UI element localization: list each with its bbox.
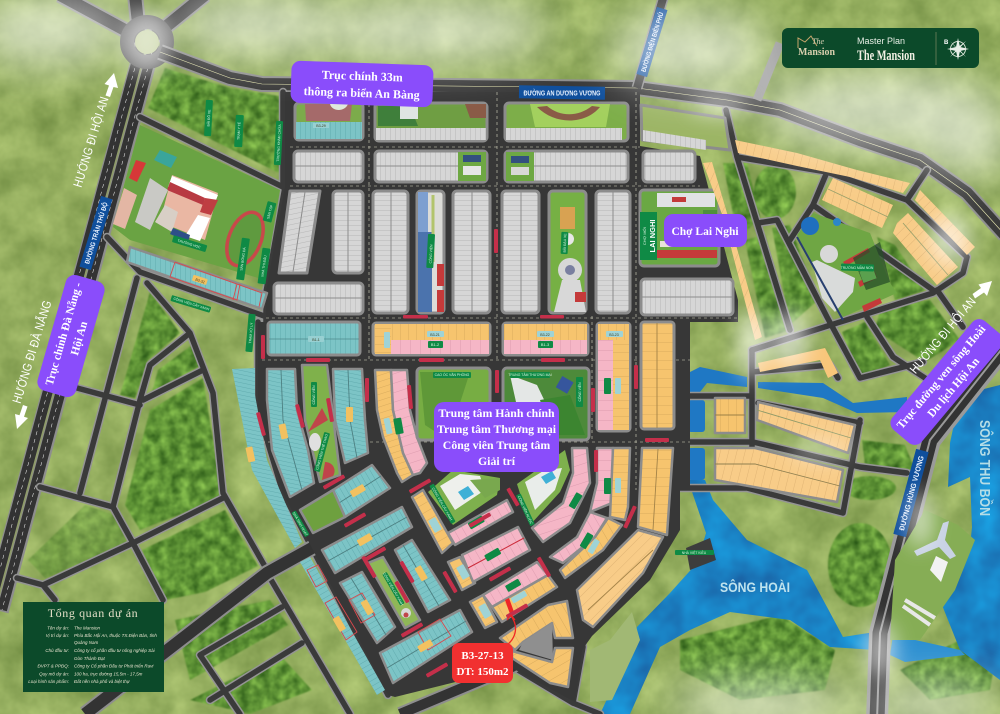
lot chips — [192, 123, 623, 653]
plate: Công viên văn hóa — [576, 377, 583, 407]
plate: park west 3 — [274, 121, 283, 165]
small river-side building — [686, 538, 716, 570]
plate: Trường học — [172, 235, 207, 252]
building: school main — [155, 175, 218, 242]
plate: block B1-5 — [484, 548, 501, 562]
logo: The Mansion mark: The — [812, 37, 824, 46]
callout: Trung tâm hành chính: Giải trí — [478, 454, 516, 468]
plate: block B1-b — [580, 532, 594, 549]
park: SE resort — [517, 450, 570, 525]
road sign: Đường An Dương Vương: ĐƯỜNG AN DƯƠNG VƯƠNG — [524, 88, 601, 98]
icon: compass — [944, 38, 969, 60]
logo: The Mansion mark — [798, 36, 835, 58]
plate: west park: CÔNG VIÊN — [311, 385, 316, 405]
callout: Trung tâm hành chính: Trung tâm Thương mại — [437, 422, 557, 436]
block B3-28 and pink — [448, 557, 475, 590]
plate: park west 1: BÃI ĐỖ XE — [206, 109, 211, 127]
land parcels: central yellow and pink — [373, 322, 674, 687]
block pink curves — [532, 448, 590, 542]
arrow: to Hội An north-west — [104, 73, 118, 97]
plate: block B1-8 — [604, 378, 611, 394]
chip B3-26 — [478, 603, 492, 619]
block B3-27 — [470, 595, 497, 628]
block B3-8 — [333, 369, 368, 463]
park: square with plaza — [549, 191, 586, 313]
plate: park sport: CÔNG VIÊN THỂ THAO — [314, 433, 329, 470]
mid lines: row 3 — [293, 192, 613, 312]
block: row 1 parks — [295, 103, 363, 140]
block B3-7 — [340, 572, 395, 643]
panel rows: Công ty cổ phần đầu tư nông nghiệp Sài — [74, 647, 156, 653]
plate: sân thể thao — [236, 238, 250, 280]
water: ponds and creek — [688, 367, 907, 480]
block B1-1 — [268, 322, 360, 355]
callout: Trung tâm hành chính: Trung tâm Hành chính — [438, 406, 555, 420]
direction label: Hướng đi Hội An (north-west): HƯỚNG ĐI HỘI AN — [70, 95, 112, 189]
block B3-21 — [373, 323, 490, 355]
block B3-10 — [395, 540, 450, 612]
callout: Trục chính 33m: Trục chính 33m — [321, 68, 403, 84]
plate: sân tập: SÂN TẬP — [266, 204, 274, 219]
chip B3-9 — [333, 616, 346, 632]
strip far east — [915, 190, 975, 255]
chip B3-18 — [615, 378, 621, 394]
panel rows: ĐVPT & PPĐQ: — [37, 664, 70, 668]
plate: sân thể thao: SÂN BÓNG ĐÁ — [238, 246, 247, 271]
park artwork: row 1 — [305, 104, 610, 127]
arrow: to Hội An east — [972, 281, 992, 298]
block B3-4 — [267, 369, 314, 497]
plate: park west 2 — [234, 115, 244, 147]
main boulevard south-west — [85, 473, 600, 714]
block: row 4 west and market east — [274, 283, 363, 314]
block B3-6 — [333, 465, 390, 517]
river label: Sông Hoài: SÔNG HOÀI — [720, 578, 790, 595]
block east columns — [641, 322, 674, 429]
arc strip north-east — [735, 140, 910, 193]
roundabout and connecting roads — [60, 0, 205, 62]
plate: block B1-a — [569, 492, 583, 509]
park: văn phòng — [417, 368, 490, 440]
road: Đường Hùng Vương — [877, 345, 1000, 714]
plate: park SW resort: CÔNG VIÊN CÂY XANH — [431, 486, 454, 522]
chip B3-6 — [350, 484, 366, 497]
callout: lot B3-27-13: DT: 150m2 — [456, 666, 509, 678]
land parcels: east yellow — [703, 140, 975, 502]
plate: block B1-2: B1-2 — [431, 342, 440, 347]
callout: Chợ Lai Nghi — [664, 214, 747, 247]
plate: Trường mầm non — [841, 263, 874, 272]
callout: Trục đường ven sông Hoài: Du lịch Hội An — [925, 355, 983, 420]
callout: Chợ Lai Nghi: Chợ Lai Nghi — [671, 226, 739, 238]
plate: park SE resort: CÔNG VIÊN NƯỚC — [517, 495, 534, 525]
plate: bãi đậu xe — [561, 232, 568, 254]
callout: Trung tâm hành chính: Công viên Trung tâm — [443, 438, 550, 452]
sports court — [154, 150, 177, 168]
water: Sông Hoài river — [600, 480, 875, 714]
panel: project overview — [23, 602, 164, 692]
plate: block B1-7 — [393, 417, 404, 435]
panel rows: Quy mô dự án: — [39, 672, 70, 676]
plate: Công viên văn hóa: CÔNG VIÊN — [577, 382, 582, 402]
chip B3-11 — [417, 639, 434, 653]
green name plates — [170, 100, 874, 607]
strip B3-32 — [127, 247, 267, 309]
plate: block B1-3: B1-3 — [541, 342, 550, 347]
small park south — [368, 557, 420, 628]
plate: Trung tâm thương mại — [508, 372, 552, 378]
plate: đồng nội — [426, 234, 435, 268]
lane markings — [262, 92, 740, 490]
block B3-11 — [380, 610, 472, 683]
panel rows: The Mansion — [74, 626, 101, 630]
chip B3-20 — [384, 332, 390, 348]
plate: Chợ mới Lai Nghi: CHỢ MỚI — [642, 227, 647, 245]
plate: park south: CÔNG VIÊN CÂY XANH — [382, 571, 405, 607]
block B3-9 — [300, 557, 385, 695]
chip B3-3 — [245, 446, 255, 462]
panel rows: Tên dự án: — [47, 626, 70, 630]
callout: Trục đường ven sông Hoài — [887, 315, 1000, 449]
block B3-5 — [322, 507, 412, 573]
red road name tags — [256, 229, 669, 678]
block: row 3 — [279, 191, 320, 273]
plate: trạm xử lý — [245, 314, 256, 352]
plate: block B1-2 — [428, 341, 443, 348]
chip B3-19 — [615, 478, 621, 493]
panel heading: Tổng quan dự án — [48, 606, 138, 620]
logo panel: The Mansion — [857, 48, 915, 64]
plate: park west 1 — [204, 100, 213, 136]
plate: block B1-4 — [505, 579, 521, 592]
callout: Trục chính Đà Nẵng - Hội An — [35, 273, 107, 399]
park: riverside path — [590, 612, 640, 702]
park of B3-6 — [300, 490, 345, 533]
road: Đường An Dương Vương — [160, 0, 1000, 235]
block west curve yellow pink — [375, 370, 413, 482]
plate: Cao ốc văn phòng — [433, 372, 471, 378]
logo: heading: Master Plan — [857, 36, 905, 46]
park: school — [113, 125, 280, 280]
plate: đồng nội: CÔNG VIÊN — [428, 244, 434, 264]
block B3-3 long — [232, 368, 302, 548]
block: row D north-east — [641, 105, 730, 150]
plate: Nhà sinh hoạt river — [675, 550, 714, 555]
callout: lot B3-27-13: B3-27-13 — [461, 650, 504, 662]
callout: Trục đường ven sông Hoài: Trục đường ven sông Hoài — [894, 322, 989, 432]
plate: block B1-c — [604, 478, 611, 494]
block large curved — [577, 530, 663, 627]
blocks south of creek — [715, 398, 745, 433]
icon: compass: B — [944, 40, 949, 46]
block east curved — [893, 213, 958, 285]
chip B3-23 — [606, 331, 623, 337]
callout: Trung tâm hành chính — [434, 402, 559, 472]
river label: Sông Thu Bồn: SÔNG THU BỒN — [976, 420, 994, 516]
chip B3-24 — [383, 418, 393, 434]
water: inlet near resort — [890, 635, 965, 662]
plate: sân tập — [263, 201, 276, 223]
plate: Trường mầm non: TRƯỜNG MẦM NON — [841, 265, 874, 270]
park: Lai Nghi market — [640, 190, 719, 266]
chip B3-25 — [587, 538, 600, 554]
chip B3-21 — [427, 331, 444, 337]
direction label: Hướng đi Hội An (east): HƯỚNG ĐI HỘI AN — [906, 294, 979, 376]
plate: Cao ốc văn phòng: CAO ỐC VĂN PHÒNG — [435, 372, 470, 377]
logo: The Mansion mark: Mansion — [798, 47, 835, 58]
callout: lot B3-27-13 — [452, 643, 513, 683]
direction label: Hướng đi Đà Nẵng: HƯỚNG ĐI ĐÀ NẴNG — [9, 298, 55, 405]
callout: Trục chính Đà Nẵng - Hội An: Hội An — [69, 320, 90, 357]
plate: trạm xử lý: TRẠM XỬ LÝ — [247, 322, 254, 344]
panel rows — [28, 626, 157, 684]
chip B3-10 — [414, 565, 428, 582]
chip B3-32: B3-32 — [195, 278, 205, 284]
water: Sông Thu Bồn river — [940, 385, 1000, 680]
chip B1-1: B1-1 — [312, 338, 320, 342]
block B3-22 — [503, 323, 588, 355]
park: trung tâm thương mại — [503, 368, 589, 440]
arrow: to Đà Nẵng — [15, 405, 28, 429]
panel rows: Công ty Cổ phần Đầu tư Phát triển Ravi — [74, 662, 154, 668]
block B3-23 — [597, 323, 630, 431]
plate: park west 2: TRẠM Y TẾ — [236, 121, 242, 140]
plate: Trường học: TRƯỜNG HỌC — [177, 238, 202, 250]
plate: block B1-6 — [468, 515, 485, 529]
chip B3-28 — [456, 564, 470, 580]
chip B3-22: B3-22 — [540, 333, 550, 337]
panel rows: Quảng Nam — [74, 639, 99, 645]
plate: Trung tâm thương mại: TRUNG TÂM THƯƠNG MẠI — [508, 373, 552, 377]
panel rows: Phía Bắc Hội An, thuộc TX.Điện Bàn, tỉnh — [74, 632, 157, 638]
panel rows: Đất nền nhà phố và biệt thự — [74, 678, 131, 684]
plate: park west 3: TRƯỜNG KHÁM CHỮA — [275, 124, 282, 162]
chip B3-7 — [360, 599, 374, 616]
panel rows: Loại hình sản phẩm: — [28, 678, 70, 684]
block creek side — [758, 348, 838, 378]
building: left wing — [113, 188, 137, 229]
plate: nhà thi đấu: NHÀ THI ĐẤU — [261, 254, 268, 277]
mid lines: row 2 — [295, 165, 694, 167]
chip B3-21: B3-21 — [430, 333, 440, 337]
park: Trường mầm non (kindergarten) — [797, 213, 897, 320]
chip B3-29 — [313, 123, 329, 128]
chip B3-29: B3-29 — [316, 124, 326, 128]
logo panel — [782, 28, 979, 68]
plate: west park — [311, 382, 317, 407]
chip B1-1 — [308, 336, 324, 342]
road base of central grid — [258, 92, 738, 702]
land parcels: grey blocks north — [274, 103, 733, 315]
chip B3-27 — [511, 590, 527, 604]
callout: Trục chính 33m: thông ra biển An Bàng — [303, 84, 420, 102]
road sign: Đường Hùng Vương: ĐƯỜNG HÙNG VƯƠNG — [897, 455, 926, 531]
chip B3-8 — [346, 407, 353, 422]
panel rows: Vị trí dự án: — [46, 633, 70, 638]
chip B3-23: B3-23 — [609, 333, 619, 337]
highlighted lot B3-27-13 — [505, 598, 514, 614]
running track — [220, 207, 270, 271]
plate: bãi đậu xe: BÃI ĐẬU XE — [562, 233, 567, 253]
road sign: Đường Trần Thủ Độ: ĐƯỜNG TRẦN THỦ ĐỘ — [81, 201, 110, 265]
plate: park B3-6: NHÀ SINH HOẠT — [292, 511, 308, 537]
park: SW resort — [428, 470, 500, 525]
park: office building — [417, 191, 444, 313]
panel rows: Gòn Thành Đạt — [74, 656, 106, 661]
block fan south — [500, 601, 573, 650]
plate: Chợ mới Lai Nghi: LAI NGHI — [648, 220, 657, 252]
chip B3-22 — [537, 331, 554, 337]
plate: block B1-3 — [538, 341, 553, 348]
plate: Chợ mới Lai Nghi — [640, 212, 657, 260]
chip B3-4 — [278, 423, 288, 439]
road sign: Đường An Dương Vương — [519, 85, 605, 100]
chip B3-32 — [192, 275, 208, 285]
grey path — [135, 178, 168, 230]
plate: Công viên cây xanh: CÔNG VIÊN CÂY XANH — [173, 296, 211, 312]
panel rows: Chủ đầu tư: — [45, 647, 70, 653]
central parks — [417, 368, 589, 525]
building: red roof wing — [129, 160, 146, 182]
plate: Nhà sinh hoạt river: NHÀ VIỆT KIỀU — [682, 550, 707, 555]
callout: Trục chính 33m — [290, 61, 434, 107]
block: row 2 — [294, 151, 363, 182]
block north-east — [822, 178, 893, 228]
resort on Thu Bồn bank — [890, 510, 975, 640]
direction label: Hướng đi Đà Nẵng — [9, 298, 55, 429]
park between teal blocks — [302, 365, 340, 482]
chip B3-29b — [428, 517, 442, 533]
land parcels: teal west — [127, 247, 472, 695]
arrow: pointer to lot — [507, 615, 516, 645]
block B3-29 and pink — [412, 490, 453, 553]
plate: nhà thi đấu — [258, 248, 270, 284]
highway: Đà Nẵng – Hội An — [0, 45, 154, 610]
callout: Trục chính Đà Nẵng - Hội An: Trục chính Đà Nẵng - — [43, 281, 85, 387]
strip east of market — [703, 162, 762, 340]
panel rows: 100 ha, trục đường 15,5m - 17,5m — [74, 672, 143, 676]
chip B3-5 — [357, 533, 373, 546]
